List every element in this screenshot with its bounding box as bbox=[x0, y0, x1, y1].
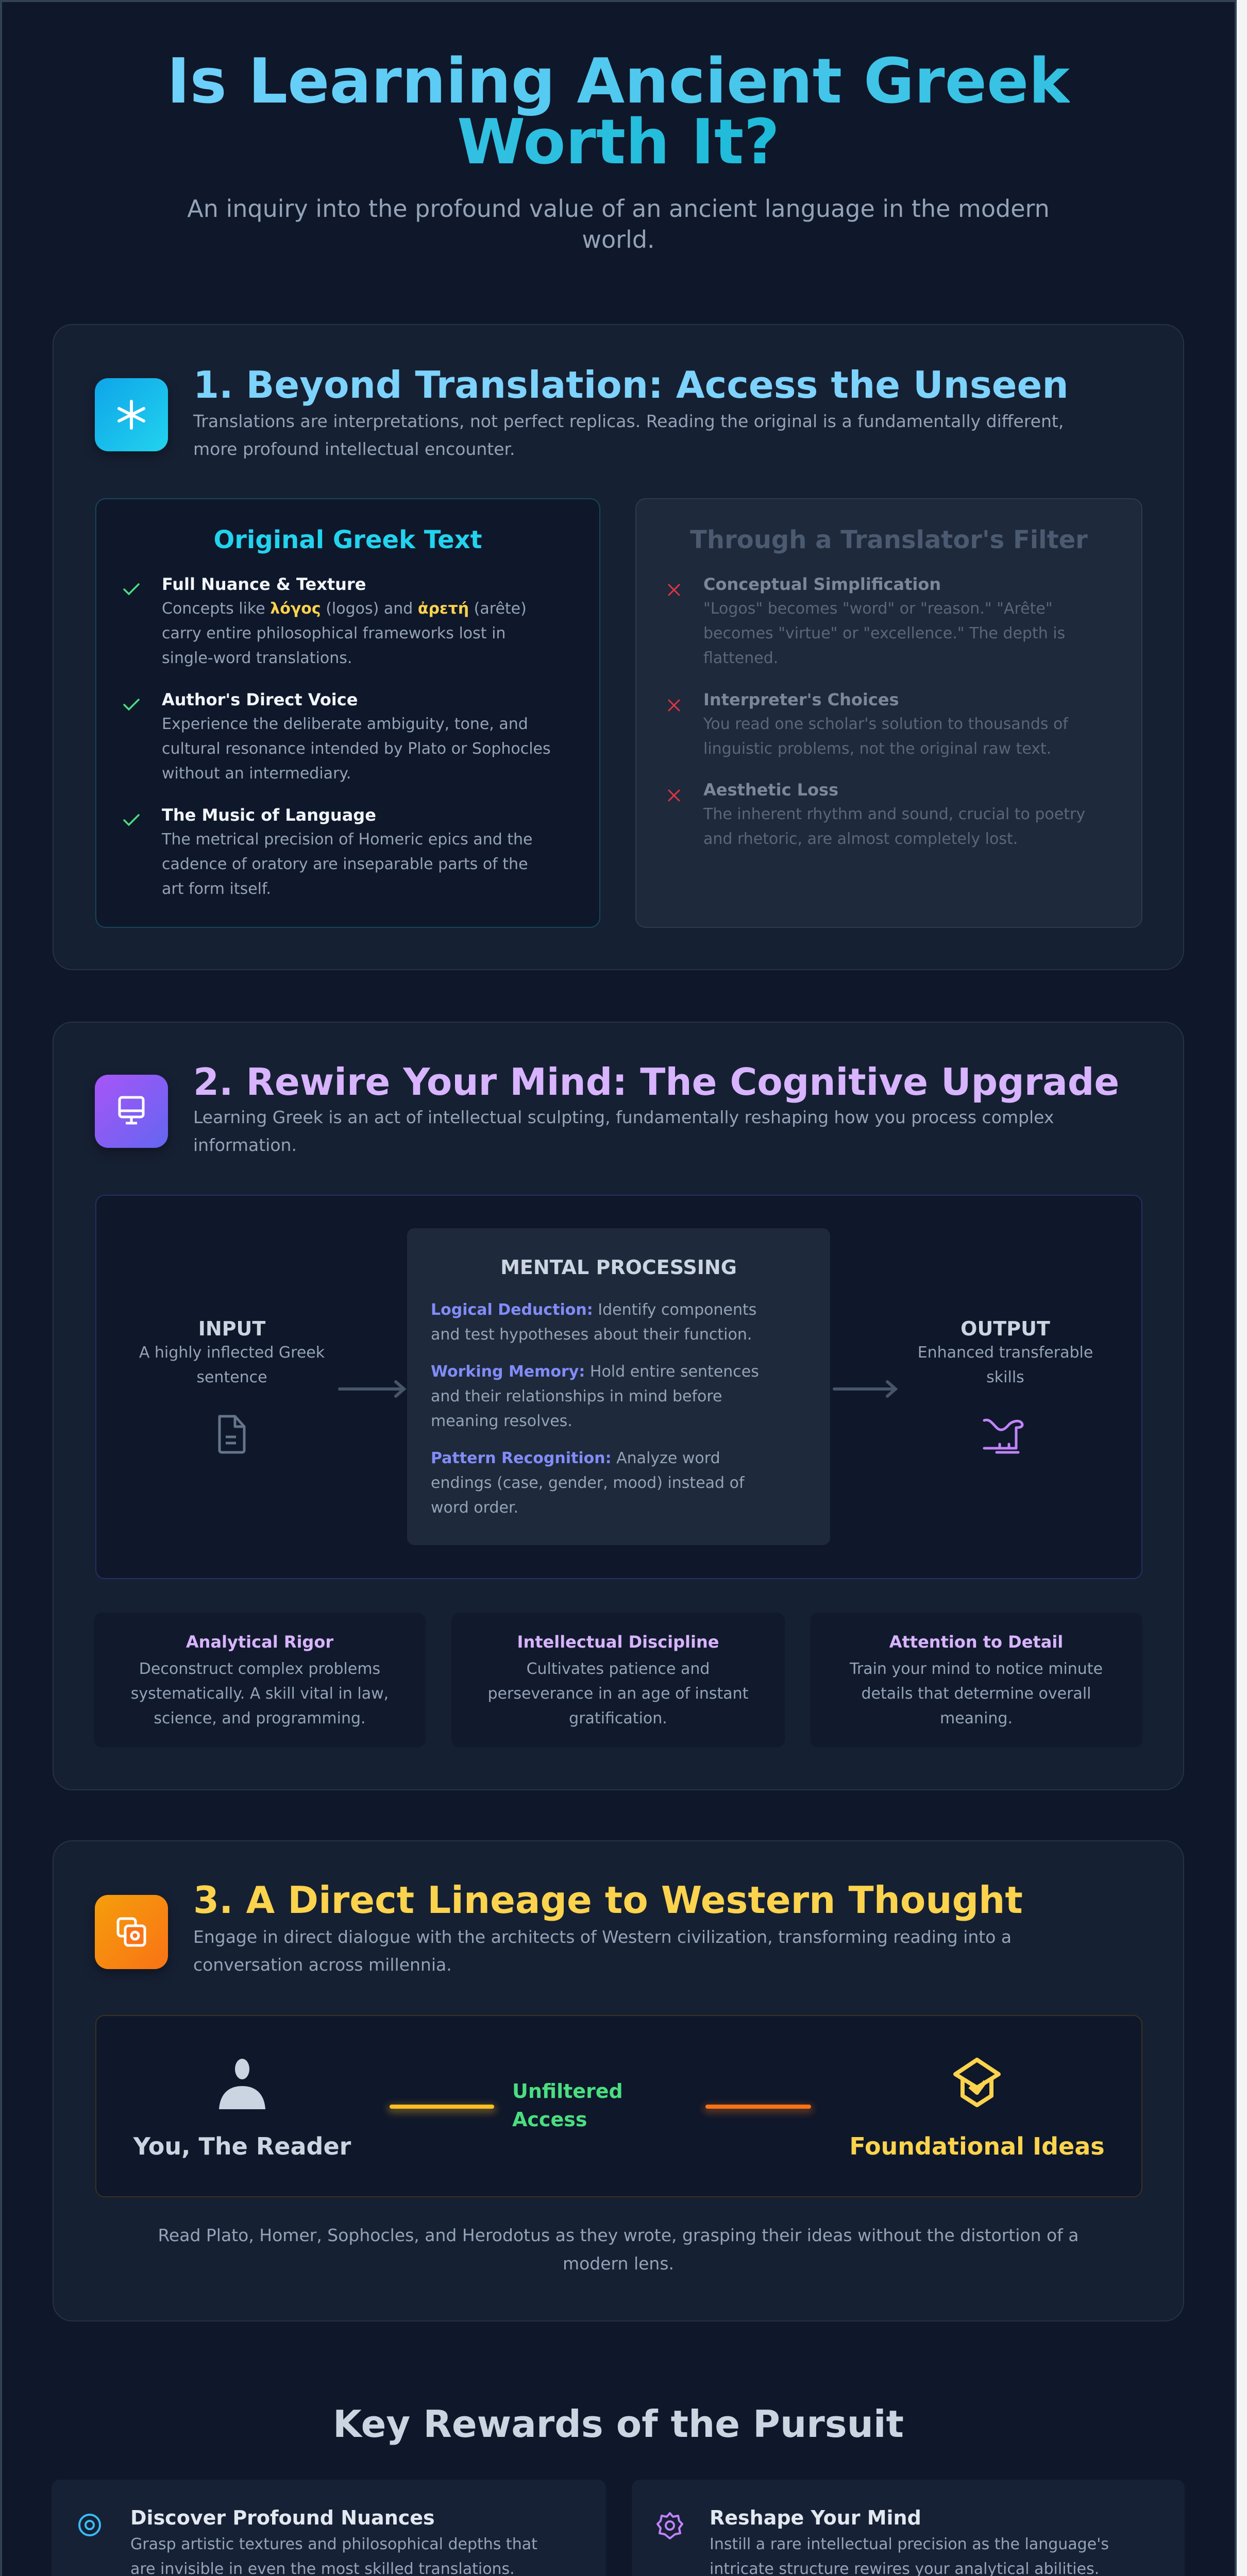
label: unfiltered access: Unfiltered bbox=[512, 2080, 623, 2103]
icon: sparkle bbox=[95, 378, 168, 451]
heading: translator's filter: Through a Translator's Filter bbox=[690, 526, 1088, 554]
icon: person bbox=[218, 2058, 266, 2110]
card: attention to detail bbox=[810, 1613, 1142, 1748]
heading: original greek: Original Greek Text bbox=[213, 526, 482, 554]
panel: section 2 cognitive upgrade bbox=[53, 1022, 1184, 1790]
item: full nuance: single-word translations. bbox=[162, 649, 352, 667]
card: reshape mind: Reshape Your Mind bbox=[710, 2506, 921, 2529]
icon: gear bbox=[656, 2512, 683, 2540]
card: reshape mind: Instill a rare intellectual precision as the language's bbox=[710, 2535, 1109, 2553]
card: analytical rigor: science, and programming. bbox=[154, 1709, 366, 1727]
text: section 1 description: more profound intellectual encounter. bbox=[193, 439, 515, 459]
icon: graduation cap bbox=[951, 2057, 1003, 2108]
text: section 2 description: information. bbox=[193, 1135, 297, 1155]
input block: sentence bbox=[196, 1368, 267, 1386]
item: music of language: cadence of oratory are inseparable parts of the bbox=[162, 855, 528, 873]
label: you the reader: You, The Reader bbox=[133, 2132, 351, 2160]
card: intellectual discipline: Cultivates patience and bbox=[527, 1660, 710, 1678]
diagram: processing flow bbox=[95, 1195, 1142, 1579]
input block: A highly inflected Greek bbox=[139, 1344, 325, 1362]
icon: skills bbox=[982, 1416, 1026, 1455]
arrow: processing to output bbox=[833, 1380, 898, 1398]
item: pattern recognition: word order. bbox=[431, 1499, 518, 1517]
text: section 3 caption bbox=[0, 2221, 1237, 2278]
text: section 3 description bbox=[193, 1923, 1012, 1979]
item: author's voice: Experience the deliberate ambiguity, tone, and bbox=[162, 715, 528, 733]
icon: document bbox=[218, 1415, 245, 1454]
arrow: input to processing bbox=[338, 1380, 406, 1398]
item: conceptual simplification: becomes "virtue" or "excellence." The depth is bbox=[703, 624, 1065, 642]
item: logical deduction bbox=[431, 1301, 756, 1344]
line: gold glow bbox=[390, 2105, 494, 2109]
item: pattern recognition: Pattern Recognition: Analyze word bbox=[431, 1449, 720, 1467]
icon: eye bbox=[77, 2513, 102, 2537]
item: interpreter's choices: linguistic problems, not the original raw text. bbox=[703, 740, 1051, 758]
subtitle: An inquiry into the profound value of an ancient language in the modern bbox=[187, 195, 1050, 223]
heading 3: 3. A Direct Lineage to Western Thought bbox=[193, 1878, 1023, 1922]
item: interpreter's choices: Interpreter's Choices bbox=[703, 690, 899, 709]
card: attention to detail: Attention to Detail bbox=[889, 1632, 1063, 1652]
card: analytical rigor: Deconstruct complex problems bbox=[139, 1660, 380, 1678]
item: aesthetic loss: Aesthetic Loss bbox=[703, 780, 838, 800]
diagram: reader to ideas bbox=[95, 2015, 1142, 2197]
item: working memory bbox=[431, 1363, 759, 1430]
item: interpreter's choices bbox=[668, 690, 1069, 758]
panel: mental processing bbox=[407, 1228, 830, 1545]
item: music of language: art form itself. bbox=[162, 880, 271, 898]
item: conceptual simplification: "Logos" becomes "word" or "reason." "Arête" bbox=[703, 600, 1053, 618]
input block: INPUT bbox=[198, 1317, 265, 1340]
output block bbox=[902, 1317, 1108, 1456]
text: section 2 description: Learning Greek is an act of intellectual sculpting, fundamentally reshaping how you process complex bbox=[193, 1107, 1054, 1127]
item: music of language: The Music of Language bbox=[162, 805, 376, 825]
item: working memory: meaning resolves. bbox=[431, 1412, 572, 1430]
panel: translator's filter bbox=[635, 498, 1142, 928]
title bbox=[167, 46, 1070, 178]
text: section 3 caption: modern lens. bbox=[563, 2253, 674, 2274]
card: analytical rigor bbox=[94, 1613, 426, 1748]
title: Is Learning Ancient Greek bbox=[167, 46, 1070, 117]
item: working memory: Working Memory: Hold entire sentences bbox=[431, 1363, 759, 1381]
item: conceptual simplification: Conceptual Simplification bbox=[703, 574, 941, 594]
panel: mental processing: MENTAL PROCESSING bbox=[500, 1256, 737, 1279]
card: analytical rigor: systematically. A skill vital in law, bbox=[131, 1685, 389, 1703]
card: intellectual discipline: Intellectual Discipline bbox=[517, 1632, 719, 1652]
panel: section 3 lineage bbox=[53, 1840, 1184, 2321]
card: analytical rigor: Analytical Rigor bbox=[186, 1632, 333, 1652]
heading 1: 1. Beyond Translation: Access the Unseen bbox=[193, 363, 1069, 406]
text: section 1 description bbox=[193, 411, 1064, 459]
label: foundational ideas: Foundational Ideas bbox=[849, 2132, 1105, 2160]
label: unfiltered access: Access bbox=[512, 2108, 587, 2131]
item: music of language bbox=[123, 805, 533, 898]
item: full nuance: carry entire philosophical frameworks lost in bbox=[162, 624, 505, 642]
card: intellectual discipline bbox=[451, 1613, 785, 1748]
item: full nuance: Full Nuance & Texture bbox=[162, 574, 366, 594]
output block: OUTPUT bbox=[960, 1317, 1050, 1340]
heading 2: 2. Rewire Your Mind: The Cognitive Upgrade bbox=[193, 1060, 1119, 1104]
item: working memory: and their relationships in mind before bbox=[431, 1387, 722, 1405]
card: discover nuances: Discover Profound Nuances bbox=[130, 2506, 435, 2529]
heading: key rewards: Key Rewards of the Pursuit bbox=[333, 2402, 904, 2446]
text: section 1 description: Translations are interpretations, not perfect replicas. Reading the original is a fundamentally different, bbox=[193, 411, 1064, 431]
card: discover nuances: Grasp artistic textures and philosophical depths that bbox=[130, 2535, 537, 2553]
subtitle bbox=[187, 195, 1050, 253]
item: pattern recognition bbox=[431, 1449, 745, 1517]
text: section 2 description bbox=[193, 1107, 1054, 1155]
item: pattern recognition: endings (case, gender, mood) instead of bbox=[431, 1474, 745, 1492]
item: conceptual simplification bbox=[668, 574, 1065, 667]
title: Worth It? bbox=[457, 107, 780, 178]
item: full nuance bbox=[123, 574, 527, 667]
item: author's voice: cultural resonance intended by Plato or Sophocles bbox=[162, 740, 551, 758]
line: orange glow bbox=[705, 2105, 811, 2109]
card: attention to detail: meaning. bbox=[940, 1709, 1013, 1727]
item: logical deduction: Logical Deduction: Identify components bbox=[431, 1301, 756, 1319]
subtitle: world. bbox=[582, 226, 655, 253]
item: logical deduction: and test hypotheses about their function. bbox=[431, 1326, 752, 1344]
card: intellectual discipline: perseverance in an age of instant bbox=[488, 1685, 748, 1703]
text: section 3 description: Engage in direct dialogue with the architects of Western civilization, transforming reading into a bbox=[193, 1927, 1012, 1947]
card: intellectual discipline: gratification. bbox=[569, 1709, 667, 1727]
item: aesthetic loss bbox=[668, 780, 1085, 848]
panel: original greek text bbox=[95, 498, 600, 928]
item: full nuance: Concepts like λόγος (logos) and ἀρετή (arête) bbox=[162, 600, 527, 618]
label: unfiltered access bbox=[512, 2077, 623, 2134]
item: author's voice bbox=[123, 690, 551, 783]
output block: skills bbox=[986, 1368, 1024, 1386]
item: interpreter's choices: You read one scholar's solution to thousands of bbox=[703, 715, 1068, 733]
card: reshape mind bbox=[632, 2480, 1185, 2576]
text: section 3 description: conversation across millennia. bbox=[193, 1955, 452, 1975]
item: aesthetic loss: and rhetoric, are almost completely lost. bbox=[703, 830, 1018, 848]
card: discover nuances bbox=[52, 2480, 606, 2576]
icon: monitor bbox=[95, 1075, 168, 1148]
icon: copy bbox=[95, 1895, 168, 1969]
item: author's voice: Author's Direct Voice bbox=[162, 690, 358, 709]
panel: section 1 beyond translation bbox=[53, 324, 1184, 970]
item: author's voice: without an intermediary. bbox=[162, 765, 351, 783]
text: section 3 caption: Read Plato, Homer, Sophocles, and Herodotus as they wrote, grasping their ideas without the distortion of a bbox=[158, 2225, 1079, 2245]
card: attention to detail: details that determine overall bbox=[862, 1685, 1091, 1703]
input block bbox=[139, 1317, 325, 1454]
item: conceptual simplification: flattened. bbox=[703, 649, 778, 667]
item: music of language: The metrical precision of Homeric epics and the bbox=[162, 831, 533, 849]
output block: Enhanced transferable bbox=[918, 1344, 1093, 1362]
card: attention to detail: Train your mind to notice minute bbox=[850, 1660, 1103, 1678]
item: aesthetic loss: The inherent rhythm and sound, crucial to poetry bbox=[703, 805, 1085, 823]
